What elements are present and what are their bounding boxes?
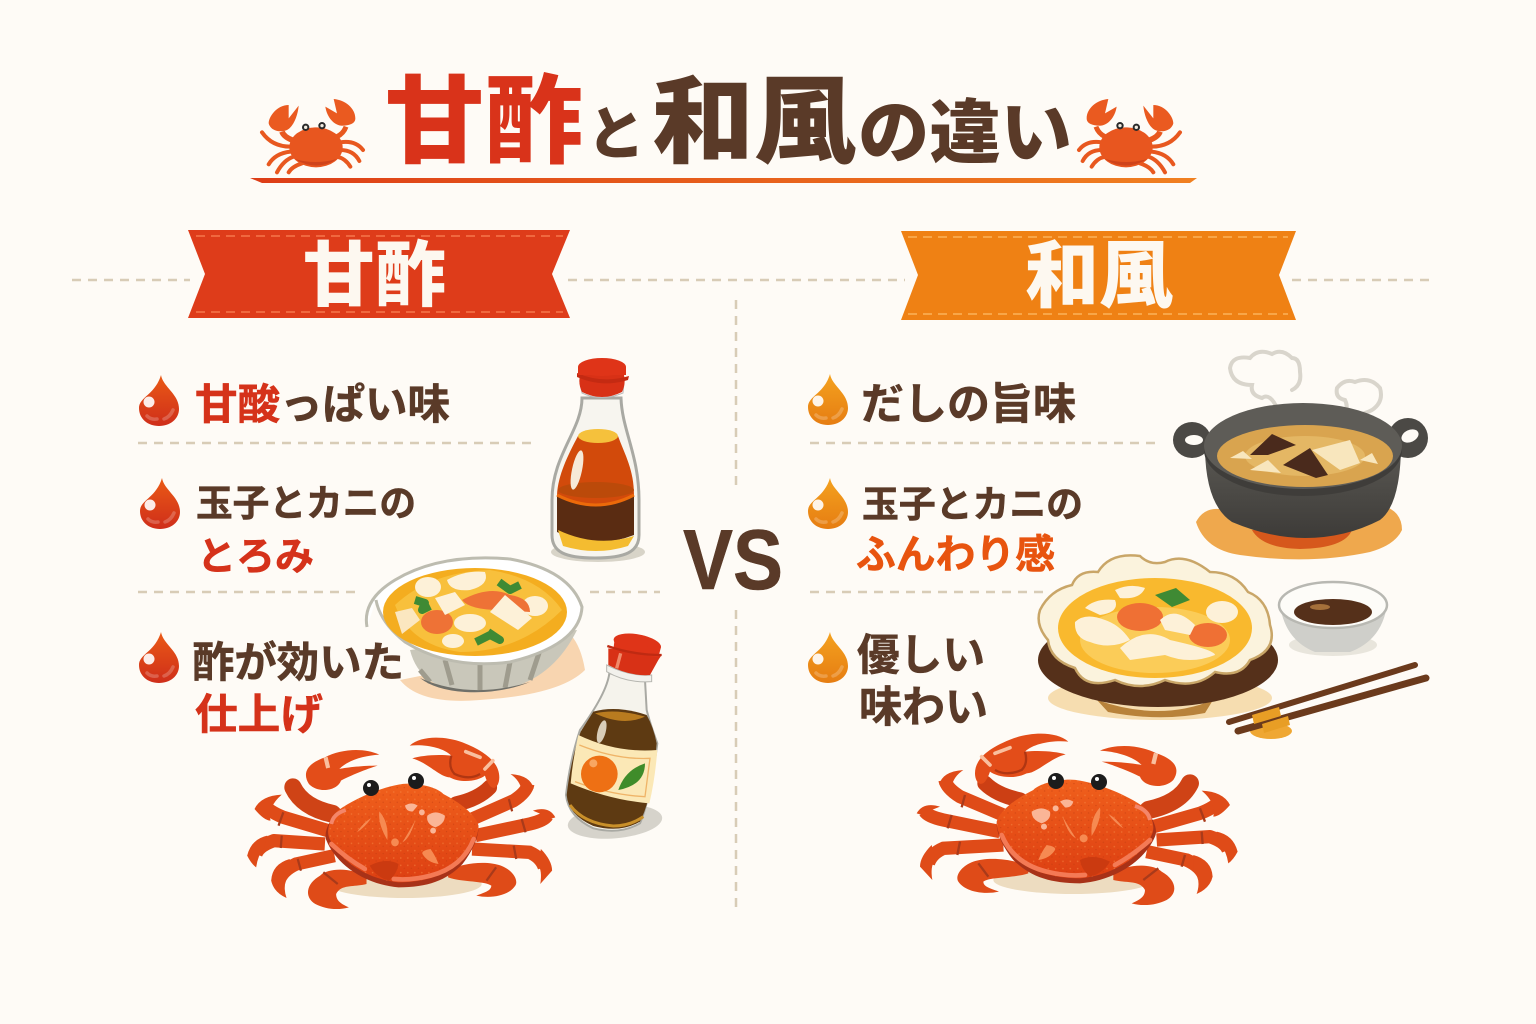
icon: drop 2: [140, 478, 180, 529]
icon: drop 3: [808, 632, 848, 683]
item: 優しい: 優しい: [857, 632, 985, 680]
bottle cap: [580, 382, 624, 398]
illustration: crab left: [247, 738, 555, 909]
illustration: clay pot: [1173, 352, 1428, 559]
icon: drop 1: [808, 374, 848, 425]
tofu and mushrooms: [1312, 440, 1360, 470]
banner label: 和風: [1025, 236, 1173, 317]
illustration: sauce dish: [1279, 582, 1387, 656]
icon: small crab right: [1079, 99, 1180, 172]
banner: 甘酢: [188, 230, 570, 318]
item: だしの旨味: だしの旨味: [861, 381, 1076, 429]
crab left eyes: [363, 773, 424, 796]
title: [250, 69, 1197, 183]
item: 酢が効いた: 酢が効いた: [192, 639, 404, 686]
item: 玉子とカニの: 玉子とカニの: [862, 484, 1083, 525]
handles: [1173, 422, 1211, 458]
illustration: soup bowl: [366, 558, 585, 701]
panel: 和風 list: [808, 374, 1155, 732]
title text: 甘酢: 甘酢: [385, 69, 583, 176]
title text: 和風: 和風: [652, 70, 856, 176]
illustration: vinegar bottle: [551, 358, 645, 562]
item: 味わい: 味わい: [859, 684, 988, 732]
item: とろみ: とろみ: [197, 536, 314, 579]
illustration: chopsticks: [1229, 665, 1426, 739]
illustration: crab right: [917, 734, 1238, 905]
banner: 和風: [901, 231, 1296, 320]
illustration: sauce bottle with label: [566, 630, 664, 842]
illustration: omelet on plate: [1038, 555, 1278, 720]
item: ふんわり感: ふんわり感: [856, 533, 1055, 577]
title underline: [250, 178, 1197, 183]
item: 玉子とカニの: 玉子とカニの: [196, 483, 416, 524]
item: 甘酸っぱい味: 甘酸っぱい味: [195, 381, 450, 428]
pot body: [1205, 448, 1401, 538]
steam: [1230, 352, 1381, 416]
panel: 甘酢 list: [138, 375, 660, 738]
title text: と: と: [587, 102, 645, 167]
icon: small crab left: [262, 99, 363, 172]
banner label: 甘酢: [303, 237, 446, 316]
VS label: VS: [683, 513, 783, 608]
mat: [1196, 505, 1402, 559]
item: 仕上げ: 仕上げ: [195, 691, 323, 738]
icon: drop 3: [139, 632, 179, 683]
bottle cap: [607, 665, 652, 682]
title text: の違い: の違い: [858, 94, 1072, 172]
crab right eyes: [1048, 773, 1107, 790]
icon: drop 1: [139, 375, 179, 426]
icon: drop 2: [808, 478, 848, 529]
